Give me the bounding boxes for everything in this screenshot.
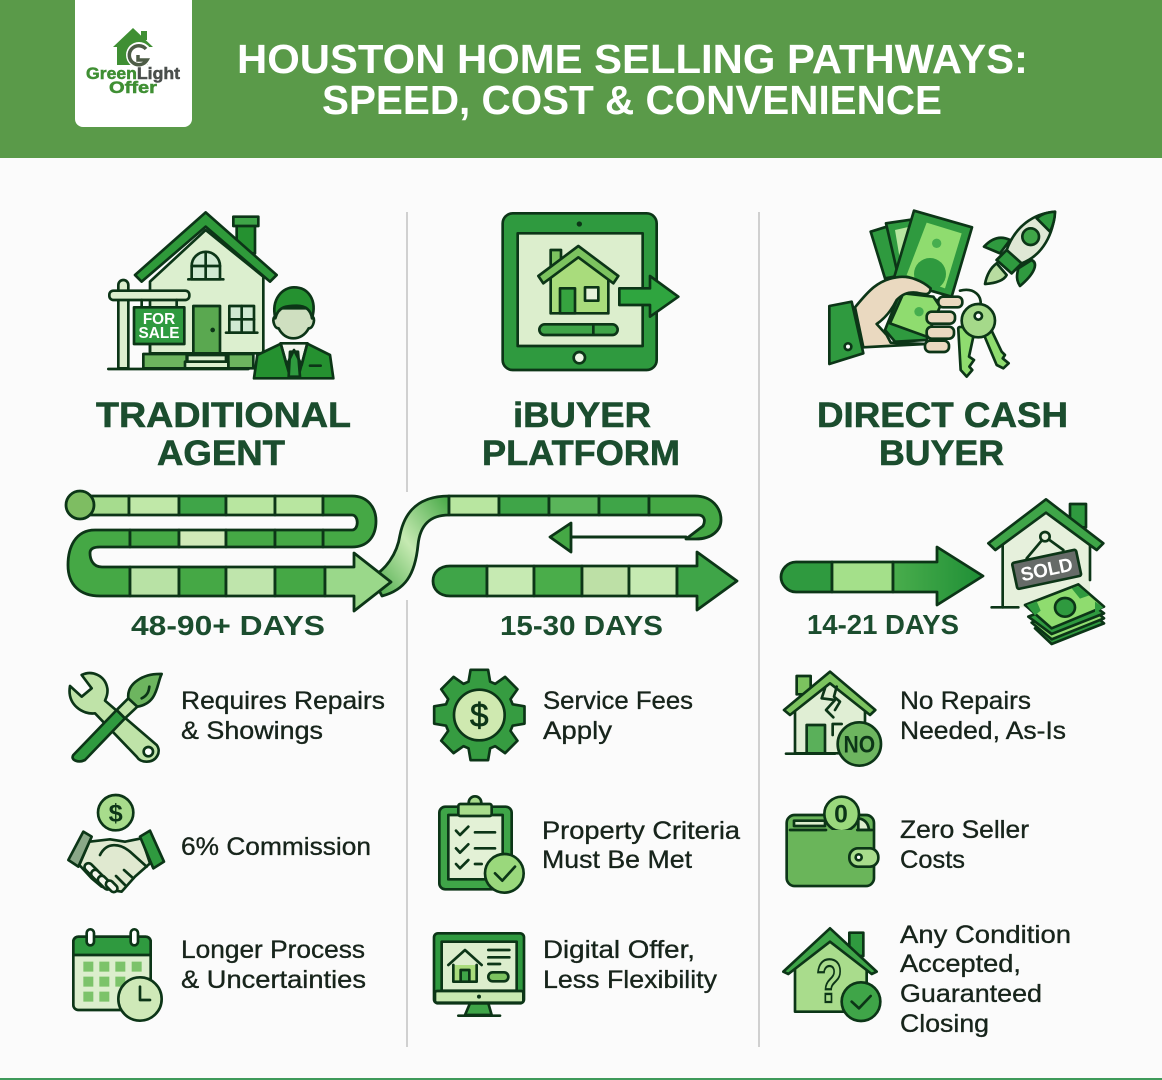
title: SPEED, COST & CONVENIENCE [322, 77, 942, 123]
duration: traditional: 48-90+ DAYS [131, 610, 325, 641]
item: service fees: Apply [543, 717, 613, 745]
column dividers [406, 212, 760, 1047]
item: no repairs [784, 672, 1066, 766]
item: commission: 6% Commission [181, 833, 371, 861]
item: any condition [783, 921, 1071, 1038]
item: longer process [73, 929, 366, 1021]
cash stack [1025, 584, 1104, 644]
heading: direct cash buyer: DIRECT CASH [817, 396, 1068, 435]
item: zero seller costs [787, 797, 1029, 886]
item: digital offer: Less Flexibility [543, 966, 718, 994]
icon: clipboard with check [439, 796, 524, 893]
item: service fees [434, 670, 693, 760]
timeline: direct cash arrow [781, 547, 983, 605]
item: longer process: & Uncertainties [181, 966, 366, 994]
item: digital offer: Digital Offer, [543, 936, 695, 964]
item: property criteria: Must Be Met [542, 846, 692, 874]
icon: cracked house with no badge: NO [843, 732, 875, 759]
heading: direct cash buyer: BUYER [879, 434, 1004, 473]
for sale sign [134, 307, 184, 344]
item: digital offer [434, 933, 718, 1016]
icon: handshake with coin [68, 795, 164, 894]
item: repairs [70, 673, 385, 762]
icon: gear with dollar [434, 670, 524, 760]
arrow [619, 276, 678, 317]
item: commission [68, 795, 371, 894]
item: longer process: Longer Process [181, 936, 365, 964]
icon: handshake with coin: $ [109, 800, 123, 828]
icon: wallet with zero coin: 0 [834, 802, 848, 829]
timeline: ibuyer path [433, 496, 737, 610]
heading: traditional agent: AGENT [157, 434, 285, 473]
icon: hand with cash, keys and rocket [829, 211, 1055, 377]
sold sign [1012, 549, 1081, 589]
logo card: GreenLight [86, 64, 180, 83]
s-curve connector [372, 496, 449, 596]
icon: monitor with house listing [434, 933, 524, 1016]
item: any condition: Guaranteed [900, 980, 1042, 1008]
item: service fees: Service Fees [543, 687, 693, 715]
item: no repairs: Needed, As-Is [900, 717, 1066, 745]
item: zero seller costs: Zero Seller [900, 816, 1029, 844]
icon: cracked house with no badge [784, 672, 881, 766]
duration: ibuyer: 15-30 DAYS [500, 610, 663, 641]
timeline: traditional agent winding path [66, 491, 449, 611]
item: zero seller costs: Costs [900, 846, 965, 874]
header band [0, 0, 1162, 158]
icon: wrench and paintbrush [70, 673, 162, 762]
icon: tablet with house [503, 213, 678, 370]
rocket [984, 212, 1055, 286]
heading: traditional agent: TRADITIONAL [96, 396, 351, 435]
logo card: Offer [109, 78, 157, 97]
for sale sign: SALE [139, 325, 179, 342]
heading: ibuyer platform: PLATFORM [482, 434, 680, 473]
item: any condition: Any Condition [900, 921, 1071, 949]
logo card [75, 0, 192, 127]
item: repairs: Requires Repairs [181, 687, 385, 715]
icon: wallet with zero coin [787, 797, 878, 886]
icon: house with question mark and check: ? [816, 947, 843, 1016]
icon: calendar and clock [73, 929, 162, 1021]
item: repairs: & Showings [181, 717, 323, 745]
duration: direct cash: 14-21 DAYS [807, 609, 959, 640]
heading: ibuyer platform [482, 396, 680, 473]
title [237, 36, 1028, 123]
item: no repairs: No Repairs [900, 687, 1031, 715]
icon: sold house with cash [988, 499, 1104, 644]
icon: gear with dollar: $ [470, 698, 489, 735]
heading: direct cash buyer [817, 396, 1068, 473]
sold sign: SOLD [1019, 555, 1075, 586]
item: any condition: Accepted, [900, 950, 1021, 978]
icon: house for sale with agent [108, 212, 333, 378]
heading: traditional agent [96, 396, 351, 473]
item: any condition: Closing [900, 1010, 989, 1038]
item: property criteria [439, 796, 740, 893]
icon: house with question mark and check [783, 928, 880, 1021]
heading: ibuyer platform: iBUYER [513, 396, 651, 435]
title: HOUSTON HOME SELLING PATHWAYS: [237, 36, 1028, 82]
agent [254, 287, 333, 378]
for sale sign: FOR [143, 311, 175, 328]
keys [958, 304, 1009, 377]
item: property criteria: Property Criteria [542, 817, 740, 845]
